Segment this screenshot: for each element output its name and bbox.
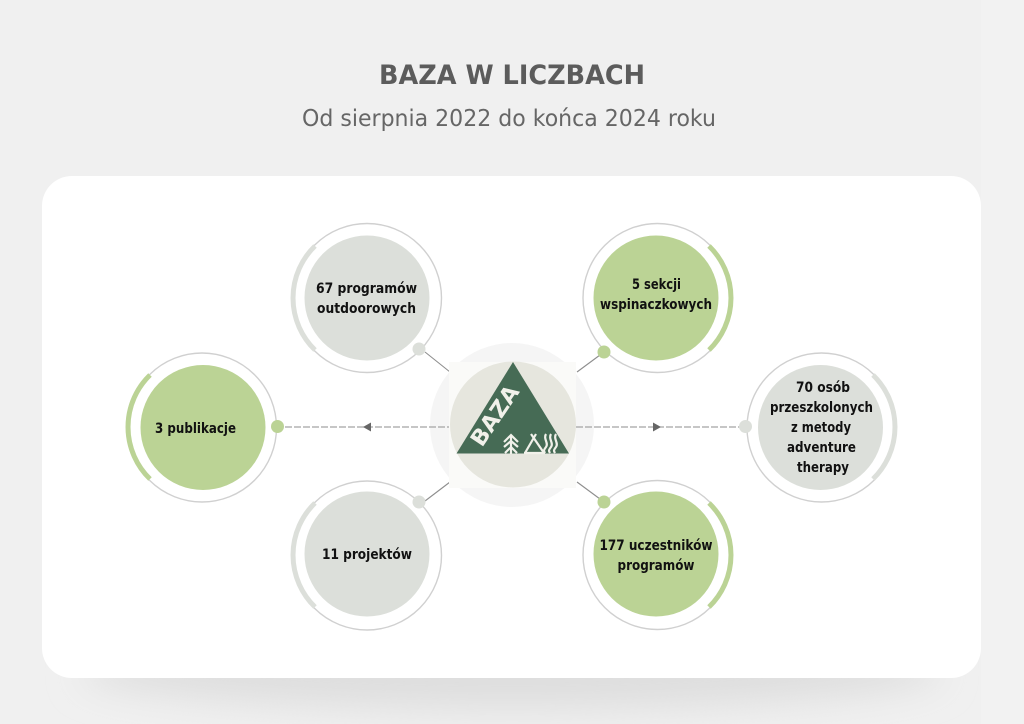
node: 67 programów outdoorowych: 67 programów (316, 281, 417, 297)
card shadow (82, 634, 942, 710)
node: 5 sekcji wspinaczkowych (583, 224, 732, 372)
node: 11 projektów (292, 481, 442, 630)
icon: tree (504, 435, 518, 454)
node: 70 osób przeszkolonych: therapy (797, 460, 849, 476)
panel: main card (42, 176, 981, 678)
icon: tipi (524, 434, 545, 453)
node: 67 programów outdoorowych (292, 224, 442, 372)
node: 70 osób przeszkolonych: 70 osób (796, 380, 850, 396)
node: 3 publikacje (128, 353, 284, 502)
node: 70 osób przeszkolonych: przeszkolonych (770, 400, 873, 416)
logo halo (430, 343, 594, 507)
logo triangle (456, 362, 569, 454)
arrow: right (653, 422, 661, 432)
node: 11 projektów: 11 projektów (322, 547, 412, 563)
node: 3 publikacje: 3 publikacje (155, 421, 236, 437)
node: 177 uczestników programów (583, 480, 732, 630)
center logo (449, 362, 576, 488)
icon: waves (544, 434, 557, 453)
logo wordmark: BAZA (466, 381, 525, 451)
subtitle: Od sierpnia 2022 do końca 2024 roku (302, 106, 716, 132)
arrow: left (363, 422, 371, 432)
connectors (285, 352, 745, 501)
title: BAZA W LICZBACH (379, 60, 645, 91)
node: 5 sekcji wspinaczkowych: wspinaczkowych (600, 297, 712, 313)
node: 70 osób przeszkolonych: adventure (787, 440, 856, 456)
node: 177 uczestników programów: 177 uczestników (600, 538, 713, 554)
node: 177 uczestników programów: programów (618, 558, 695, 574)
node: 5 sekcji wspinaczkowych: 5 sekcji (632, 277, 681, 293)
node: 67 programów outdoorowych: outdoorowych (317, 301, 416, 317)
node: 70 osób przeszkolonych: z metody (791, 420, 851, 436)
node: 70 osób przeszkolonych (739, 353, 896, 502)
logo disc (450, 362, 576, 488)
